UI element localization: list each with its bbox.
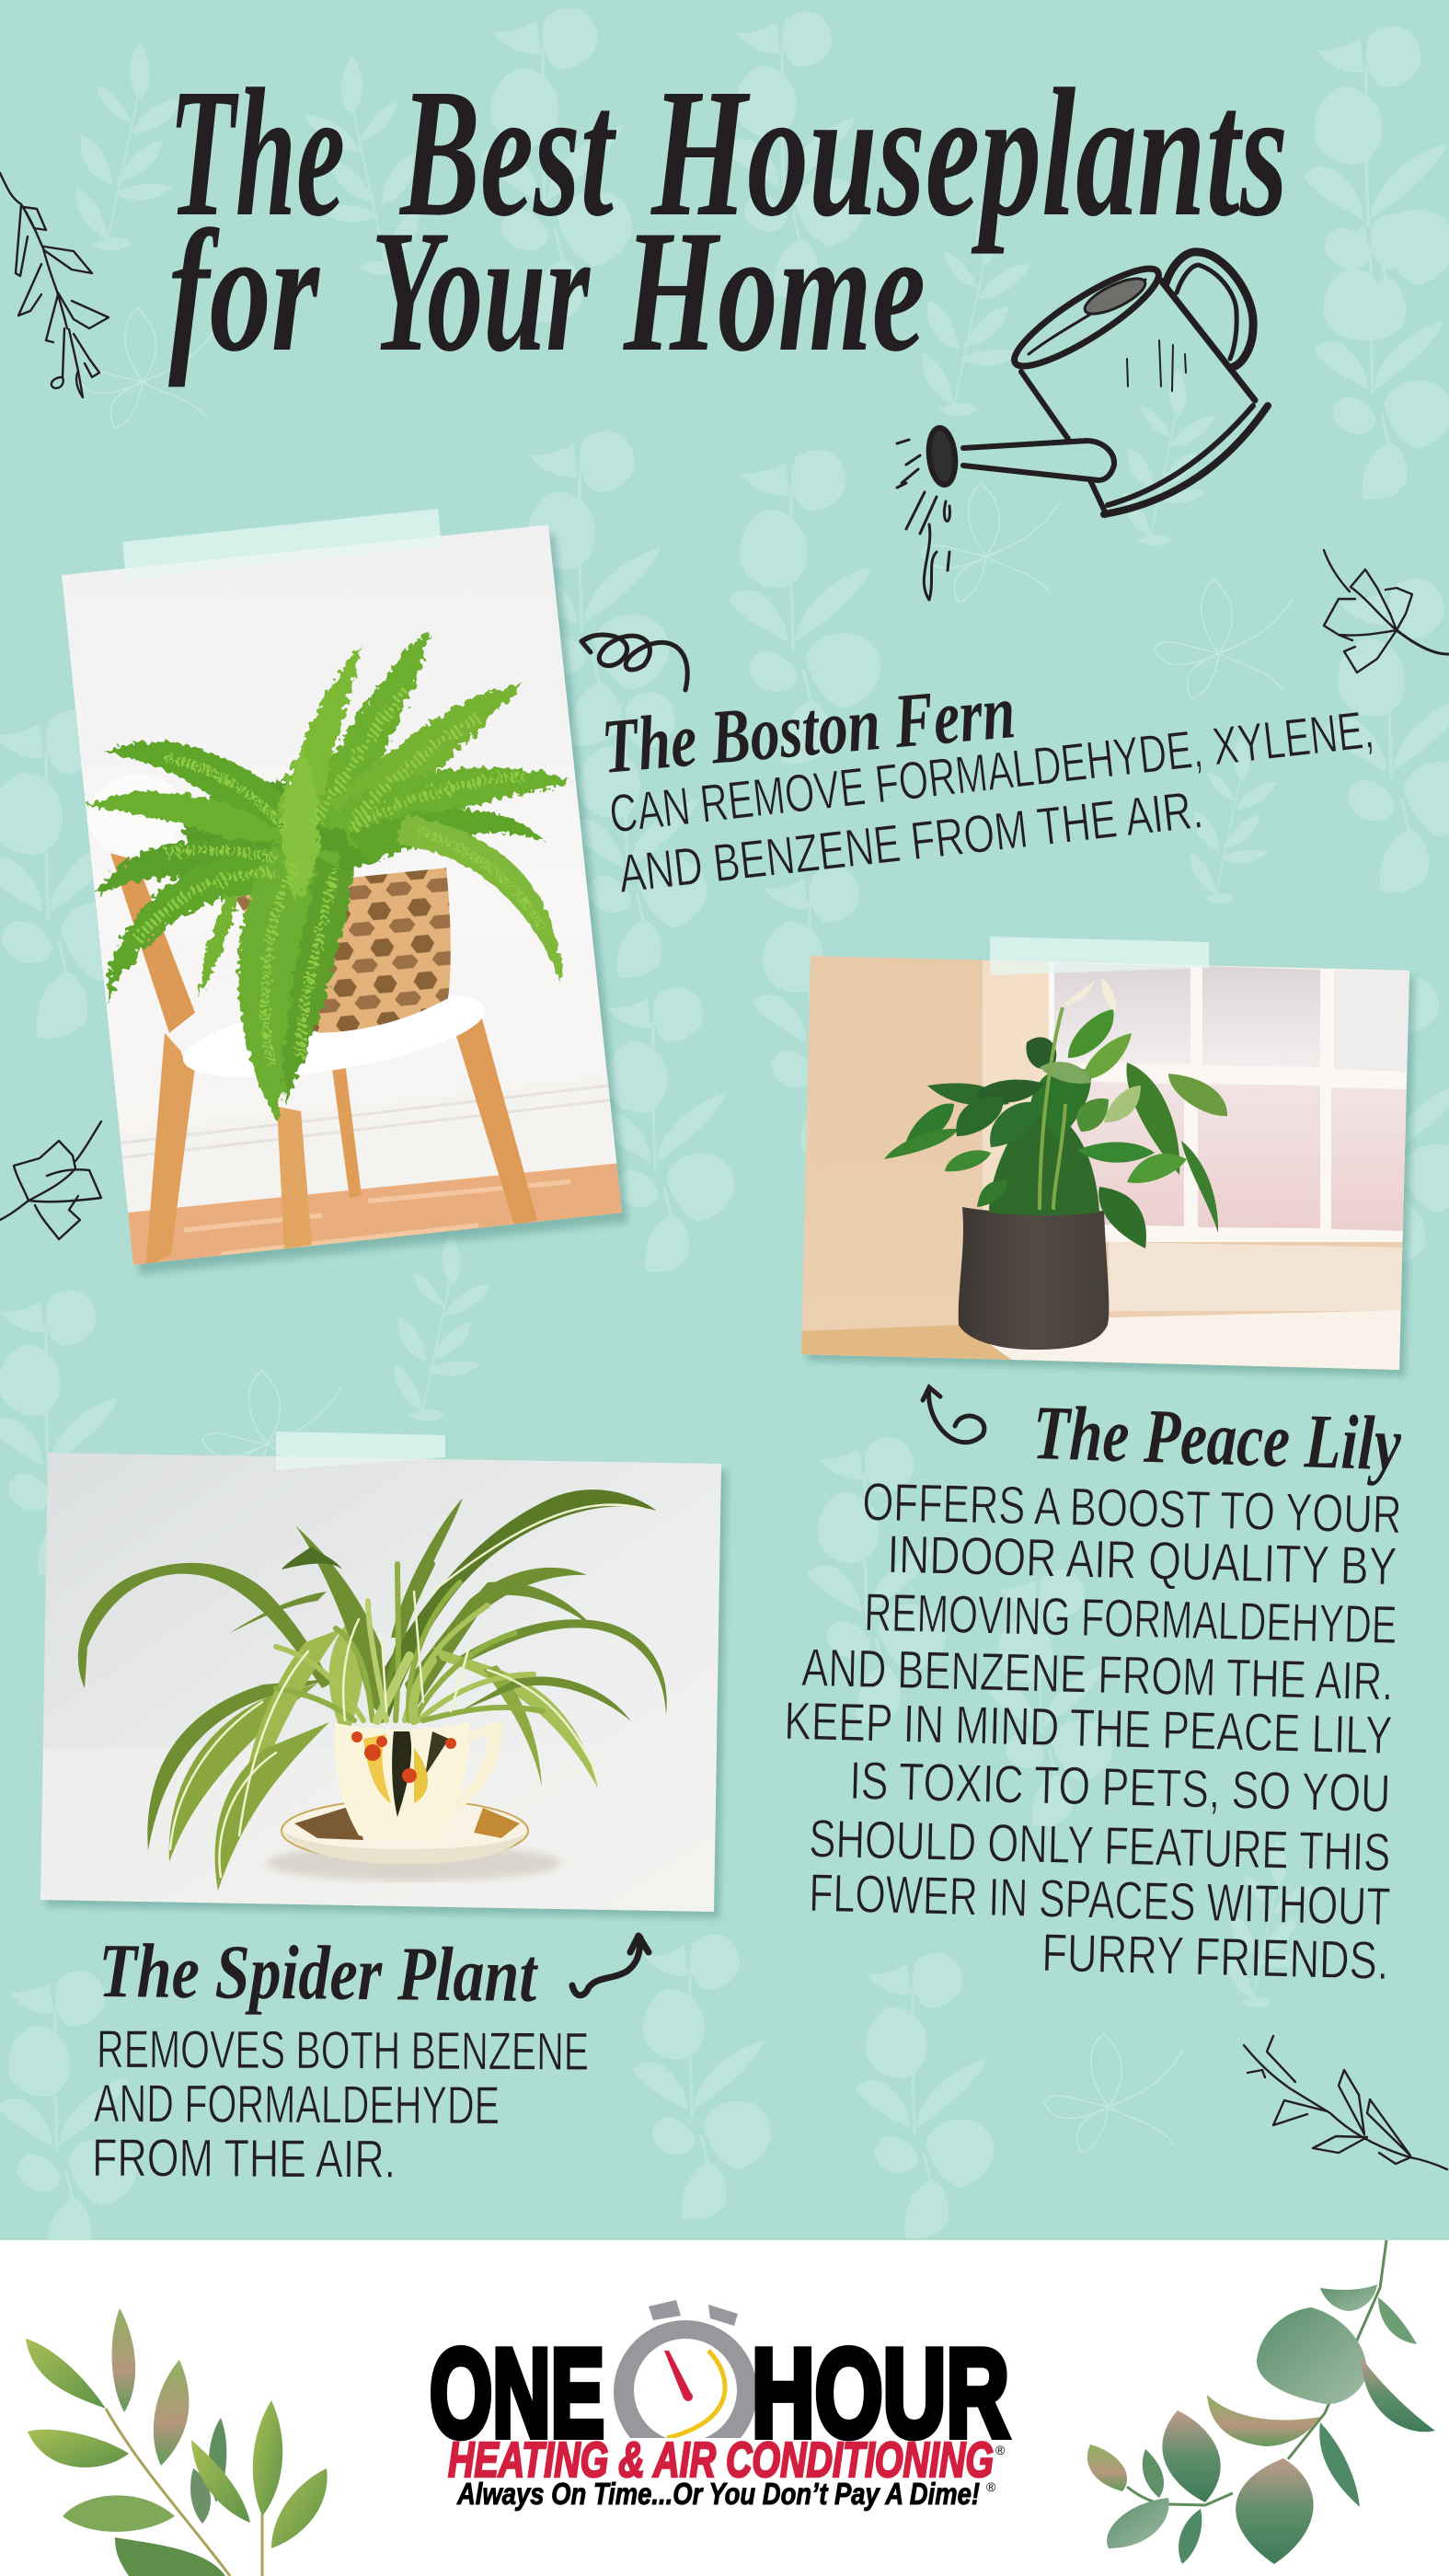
text: Spider Plant description: AND FORMALDEHYDE xyxy=(94,2074,500,2135)
logo: One Hour Heating and Air Conditioning: HEATING & AIR CONDITIONING xyxy=(448,2432,994,2488)
panel: peace lily photo xyxy=(791,948,1417,1380)
tape: peace lily photo xyxy=(990,937,1209,975)
logo: One Hour Heating and Air Conditioning: ® xyxy=(986,2479,996,2494)
title: The xyxy=(168,52,345,255)
heading: The Spider Plant: The Spider Plant xyxy=(98,1928,539,2018)
text: Peace Lily description xyxy=(784,1472,1402,1991)
illustration: left leaf branch xyxy=(26,2308,328,2576)
heading: The Boston Fern: The Boston Fern xyxy=(599,669,1018,790)
icon: squiggle arrow xyxy=(581,635,687,690)
text: Boston Fern description: AND BENZENE FROM THE AIR. xyxy=(615,779,1205,904)
icon: curl arrow xyxy=(923,1387,984,1443)
text: Spider Plant description xyxy=(92,2019,589,2190)
illustration: right leaf branch xyxy=(1087,2240,1435,2564)
text: Spider Plant description: REMOVES BOTH BENZENE xyxy=(97,2019,589,2082)
title: Your xyxy=(371,195,591,388)
panel: Boston fern photo xyxy=(37,515,644,1278)
thin outline flowers xyxy=(78,308,1293,2153)
illustration: watering can xyxy=(897,252,1268,600)
title: Home xyxy=(623,195,926,388)
logo: One Hour Heating and Air Conditioning: HOUR xyxy=(752,2323,1009,2463)
text: Boston Fern description xyxy=(606,699,1376,904)
title: for xyxy=(168,195,320,388)
logo: One Hour Heating and Air Conditioning: ONE xyxy=(430,2323,604,2463)
logo: One Hour Heating and Air Conditioning xyxy=(430,2300,1009,2511)
text: Spider Plant description: FROM THE AIR. xyxy=(92,2128,396,2190)
doodle: bottom-right sprig xyxy=(1244,2036,1447,2169)
title: Best xyxy=(399,52,617,255)
logo: One Hour Heating and Air Conditioning: ® xyxy=(995,2443,1006,2457)
tape: spider plant photo xyxy=(276,1432,445,1470)
doodle: top-left sprig xyxy=(0,173,109,397)
doodle: top-right flower xyxy=(1324,550,1448,673)
title xyxy=(168,52,1288,388)
panel: spider plant photo xyxy=(37,1444,727,1923)
tape: fern photo xyxy=(122,509,442,579)
logo: One Hour Heating and Air Conditioning: Always On Time...Or You Don’t Pay A Dime! xyxy=(456,2477,980,2511)
footer band xyxy=(0,2240,1449,2576)
doodle: left flower xyxy=(0,1121,101,1239)
icon: swoosh arrow xyxy=(572,1936,649,1995)
